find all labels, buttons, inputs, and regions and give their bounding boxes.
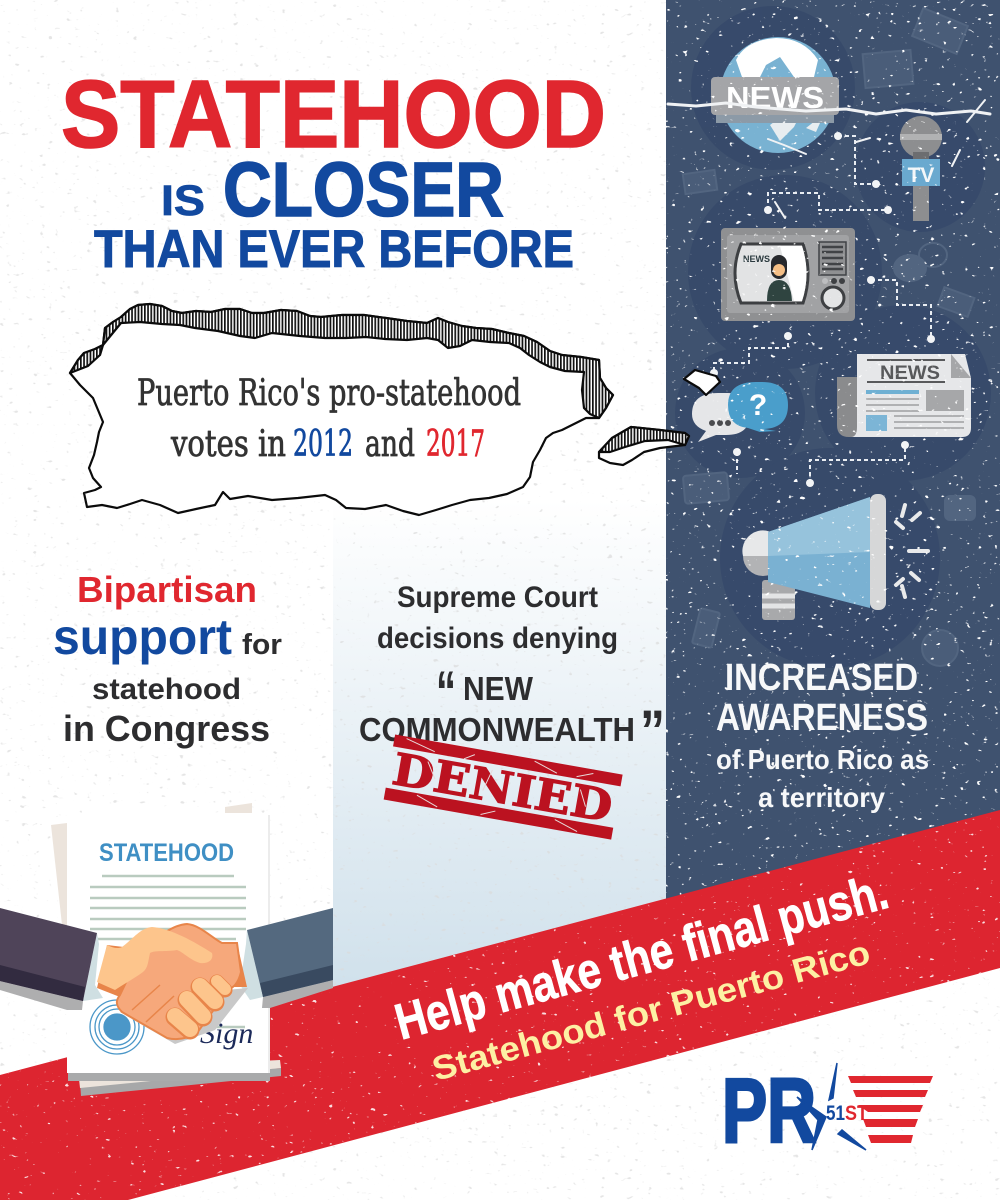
text block: supreme court: Supreme Court	[397, 581, 598, 614]
handshake	[97, 924, 248, 1044]
map caption: and	[365, 424, 415, 465]
logo flag stripes	[848, 1076, 933, 1143]
icon: news globe	[711, 37, 839, 153]
map caption: Puerto Rico's pro-statehood	[137, 373, 521, 414]
logo: PR 51st: ST	[845, 1102, 868, 1125]
text block: increased awareness: a territory	[758, 782, 885, 813]
logo: PR 51st	[722, 1061, 933, 1162]
map: Culebra island	[684, 370, 720, 395]
text block: supreme court	[359, 581, 665, 764]
title: THAN EVER BEFORE	[94, 220, 574, 279]
map caption: 2017	[426, 424, 485, 465]
text block: increased awareness	[716, 657, 929, 813]
connectors	[714, 136, 931, 483]
map caption	[137, 373, 521, 465]
illustration: statehood handshake document	[0, 803, 333, 1096]
icon backdrops	[675, 6, 991, 668]
icon: TV microphone: TV	[908, 164, 934, 187]
text block: bipartisan support	[53, 569, 282, 749]
signature: Sign	[200, 1017, 253, 1050]
text block: bipartisan support: statehood	[92, 673, 241, 706]
icon: speech bubbles	[692, 382, 788, 442]
title: IS	[161, 177, 205, 225]
map: Puerto Rico outline	[70, 304, 720, 515]
icon: news globe: NEWS	[726, 80, 824, 115]
icon: megaphone	[742, 494, 928, 620]
map caption: 2012	[293, 424, 353, 465]
text block: supreme court: decisions denying	[377, 622, 618, 655]
logo letters: PR	[722, 1061, 816, 1162]
map: Vieques island	[599, 427, 689, 465]
icon: television news anchor: NEWS	[743, 254, 770, 264]
logo 51st: 51	[826, 1102, 845, 1125]
banner headline: Help make the final push.	[389, 862, 894, 1051]
text block: bipartisan support: in Congress	[63, 708, 270, 749]
ghost icons	[683, 8, 975, 666]
seal	[90, 1000, 144, 1054]
text block: increased awareness: AWARENESS	[716, 697, 928, 739]
text block: increased awareness: INCREASED	[725, 657, 918, 699]
text block: bipartisan support: for	[242, 629, 282, 661]
document heading: STATEHOOD	[99, 839, 234, 867]
icon: folded newspaper: NEWS	[880, 363, 940, 384]
text block: supreme court: “	[436, 660, 456, 725]
text block: supreme court: ”	[640, 699, 665, 764]
text block: supreme court: NEW	[463, 670, 534, 707]
text block: supreme court: COMMONWEALTH	[359, 711, 635, 748]
logo star	[797, 1063, 866, 1150]
icon: folded newspaper	[837, 354, 971, 437]
text block: bipartisan support: Bipartisan	[77, 569, 257, 610]
panel: right news column	[666, 0, 1000, 900]
banner subhead: Statehood for Puerto Rico	[428, 934, 874, 1089]
icon: television news anchor	[721, 228, 855, 321]
icon: speech bubbles: ?	[749, 389, 767, 422]
title: STATEHOOD	[61, 61, 606, 168]
map caption: votes in	[170, 424, 286, 465]
text block: bipartisan support: support	[53, 609, 232, 665]
red banner	[0, 810, 1000, 1200]
right sleeve	[240, 908, 333, 1008]
stamp: denied: DENIED	[389, 744, 616, 833]
panel: centre column gradient	[333, 500, 666, 1000]
title	[61, 61, 606, 279]
icon: TV microphone	[900, 116, 942, 221]
left sleeve	[0, 908, 103, 1010]
title: CLOSER	[223, 147, 504, 233]
text block: increased awareness: of Puerto Rico as	[716, 744, 929, 775]
